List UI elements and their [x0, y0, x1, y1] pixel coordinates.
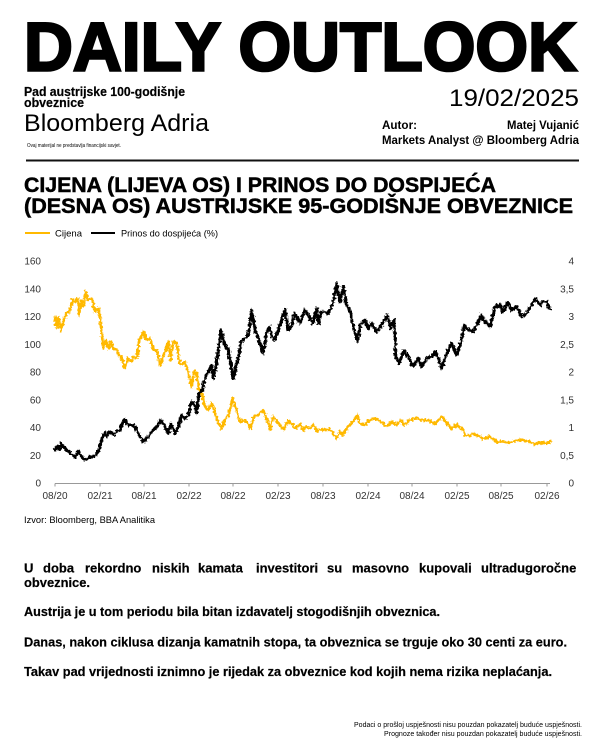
- date: 19/02/2025: [449, 85, 579, 112]
- body text: U: [24, 560, 33, 576]
- left axis labels: 100: [24, 340, 41, 351]
- left axis labels: 140: [24, 284, 41, 295]
- body text: Takav pad vrijednosti iznimno je rijedak za obveznice kod kojih nema rizika neplaćanja.: [24, 664, 552, 679]
- right axis labels: 0,5: [560, 451, 574, 462]
- body text: kupovali: [419, 560, 472, 576]
- x axis: 08/24: [399, 491, 425, 502]
- body text: [24, 560, 576, 679]
- right axis labels: 2: [568, 368, 574, 378]
- x axis: 08/23: [310, 491, 336, 502]
- x axis: 02/25: [444, 491, 470, 502]
- author block: Matej Vujanić: [507, 118, 579, 132]
- left axis labels: 0: [35, 478, 41, 490]
- right axis labels: [560, 256, 574, 490]
- x axis: 08/25: [488, 491, 514, 502]
- x axis: 02/26: [534, 491, 560, 502]
- subtitle: [24, 85, 185, 110]
- x axis: 02/23: [265, 491, 291, 502]
- body text: su: [327, 560, 342, 576]
- left axis labels: 40: [30, 423, 41, 434]
- left axis labels: 20: [30, 451, 41, 462]
- chart heading: CIJENA (LIJEVA OS) I PRINOS DO DOSPIJEĆA: [24, 173, 496, 197]
- x axis: 02/24: [355, 491, 381, 502]
- body text: Danas, nakon ciklusa dizanja kamatnih stopa, ta obveznica se trguje oko 30 centi za euro.: [24, 634, 567, 650]
- body text: investitori: [256, 560, 318, 576]
- left axis labels: [24, 256, 41, 490]
- left axis labels: 60: [30, 395, 41, 406]
- x axis: 08/21: [131, 491, 157, 502]
- right axis labels: 1: [568, 423, 574, 434]
- right axis labels: 0: [568, 478, 574, 490]
- x axis: [42, 484, 560, 502]
- chart heading: [24, 173, 573, 218]
- body text: obveznice.: [24, 575, 90, 590]
- footer disclaimer: [354, 722, 582, 738]
- legend: Cijena: [55, 228, 83, 240]
- author block: Markets Analyst @ Bloomberg Adria: [382, 133, 579, 147]
- right axis labels: 2,5: [560, 340, 574, 351]
- body text: rekordno: [85, 560, 141, 576]
- logo: Bloomberg Adria: Bloomberg Adria: [24, 110, 210, 137]
- legend: [25, 228, 218, 240]
- body text: ultradugoročne: [481, 560, 576, 576]
- legend: Prinos do dospijeća (%): [121, 228, 218, 240]
- right axis labels: 3,5: [560, 284, 574, 295]
- right axis labels: 1,5: [560, 395, 574, 406]
- disclaimer note: Ovaj materijal ne predstavlja financijski savjet.: [27, 143, 121, 149]
- footer disclaimer: Podaci o prošloj uspješnosti nisu pouzdan pokazatelj buduće uspješnosti.: [354, 722, 582, 729]
- title: DAILY OUTLOOK: [24, 8, 577, 86]
- x axis: 08/22: [220, 491, 246, 502]
- x axis: 08/20: [42, 491, 68, 502]
- body text: doba: [43, 560, 75, 576]
- left axis labels: 80: [30, 368, 41, 378]
- line chart: [24, 256, 574, 502]
- x axis: 02/21: [87, 491, 113, 502]
- right axis labels: 4: [568, 256, 574, 268]
- series: price (yellow): [55, 292, 550, 444]
- body text: Austrija je u tom periodu bila bitan izdavatelj stogodišnjih obveznica.: [24, 604, 440, 619]
- chart heading: (DESNA OS) AUSTRIJSKE 95-GODIŠNJE OBVEZNICE: [24, 194, 573, 218]
- left axis labels: 160: [24, 256, 41, 268]
- x axis: 02/22: [176, 491, 202, 502]
- author block: [382, 118, 579, 147]
- body text: niskih: [152, 560, 190, 576]
- author block: Autor:: [382, 118, 417, 132]
- series: yield (black): [55, 283, 550, 460]
- source note: Izvor: Bloomberg, BBA Analitika: [24, 515, 156, 526]
- body text: masovno: [352, 560, 409, 576]
- footer disclaimer: Prognoze također nisu pouzdan pokazatelj buduće uspješnosti.: [384, 731, 582, 738]
- body text: kamata: [198, 560, 244, 576]
- right axis labels: 3: [568, 312, 574, 323]
- left axis labels: 120: [24, 312, 41, 323]
- subtitle: obveznice: [24, 96, 84, 110]
- subtitle: Pad austrijske 100-godišnje: [24, 85, 185, 99]
